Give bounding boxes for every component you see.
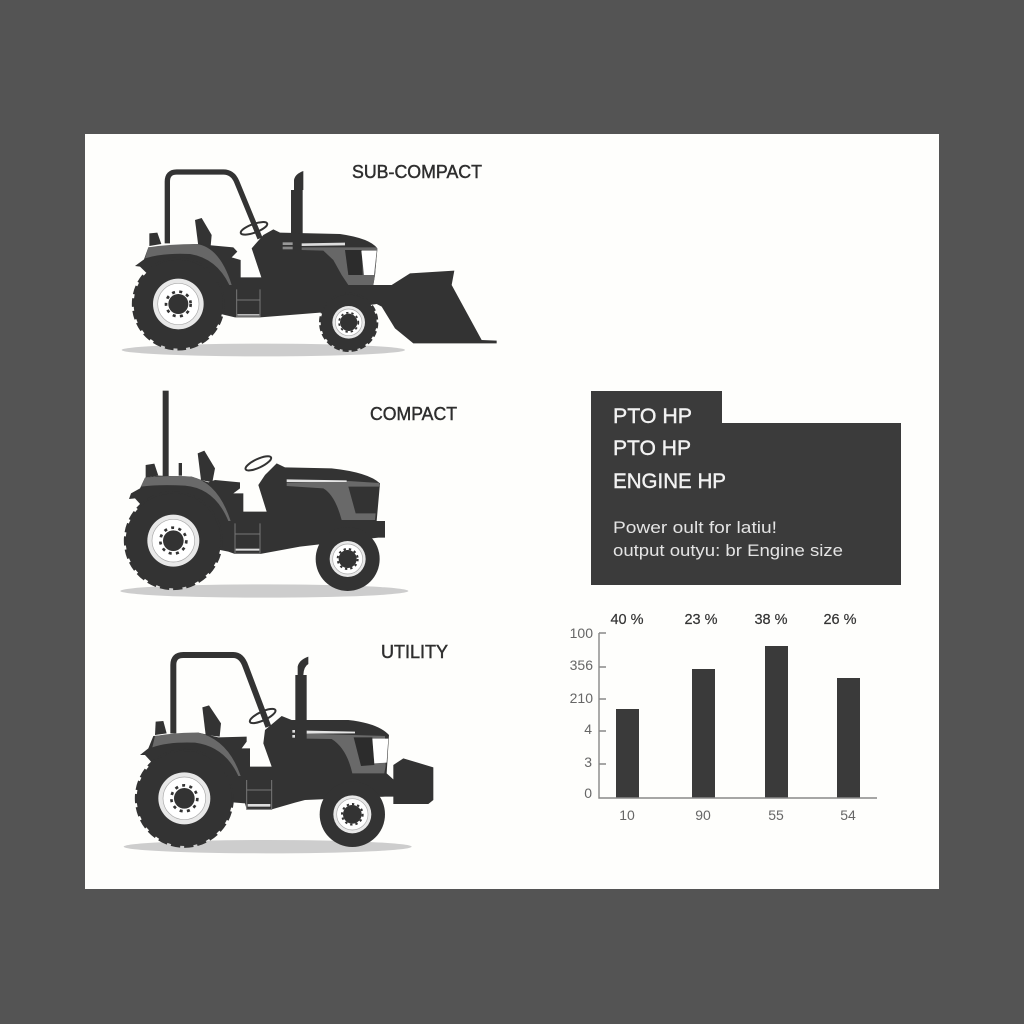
x axis labels: 10 (619, 807, 635, 823)
x axis labels: 90 (695, 807, 711, 823)
y axis labels: 0 (584, 785, 592, 801)
tractor: compact (120, 391, 408, 598)
panel: horsepower key: PTO HP (613, 405, 692, 428)
front wheel (320, 294, 377, 351)
tractor: utility with front weight (124, 655, 433, 853)
y axis labels: 100 (570, 625, 593, 641)
tractor: sub-compact with loader (122, 171, 497, 356)
rear wheel (136, 750, 233, 847)
value labels: 23 % (684, 612, 718, 628)
x axis labels: 54 (840, 807, 856, 823)
value labels: 26 % (823, 612, 857, 628)
rear wheel (133, 259, 224, 349)
y axis labels: 4 (584, 721, 592, 737)
value labels (610, 612, 857, 628)
heading: compact: COMPACT (370, 404, 457, 424)
value labels: 40 % (610, 612, 644, 628)
panel: horsepower key: ENGINE HP (613, 470, 726, 493)
y axis labels: 3 (584, 754, 592, 770)
panel: white sheet (85, 134, 939, 889)
heading: utility: UTILITY (381, 642, 448, 662)
x axis labels (619, 807, 856, 823)
front wheel (320, 782, 385, 847)
rear wheel (125, 492, 222, 589)
heading: sub-compact: SUB-COMPACT (352, 162, 482, 182)
panel: horsepower key: Power oult for latiu! (613, 518, 777, 537)
y axis labels: 210 (570, 690, 593, 706)
bar chart (570, 612, 877, 823)
x axis labels: 55 (768, 807, 784, 823)
front wheel (316, 527, 380, 591)
y axis labels: 356 (570, 657, 593, 673)
panel: horsepower key: output outyu: br Engine size (613, 541, 843, 560)
panel: horsepower key: PTO HP (613, 437, 691, 460)
y axis labels (570, 625, 593, 801)
panel: horsepower key (591, 391, 901, 585)
value labels: 38 % (754, 612, 788, 628)
